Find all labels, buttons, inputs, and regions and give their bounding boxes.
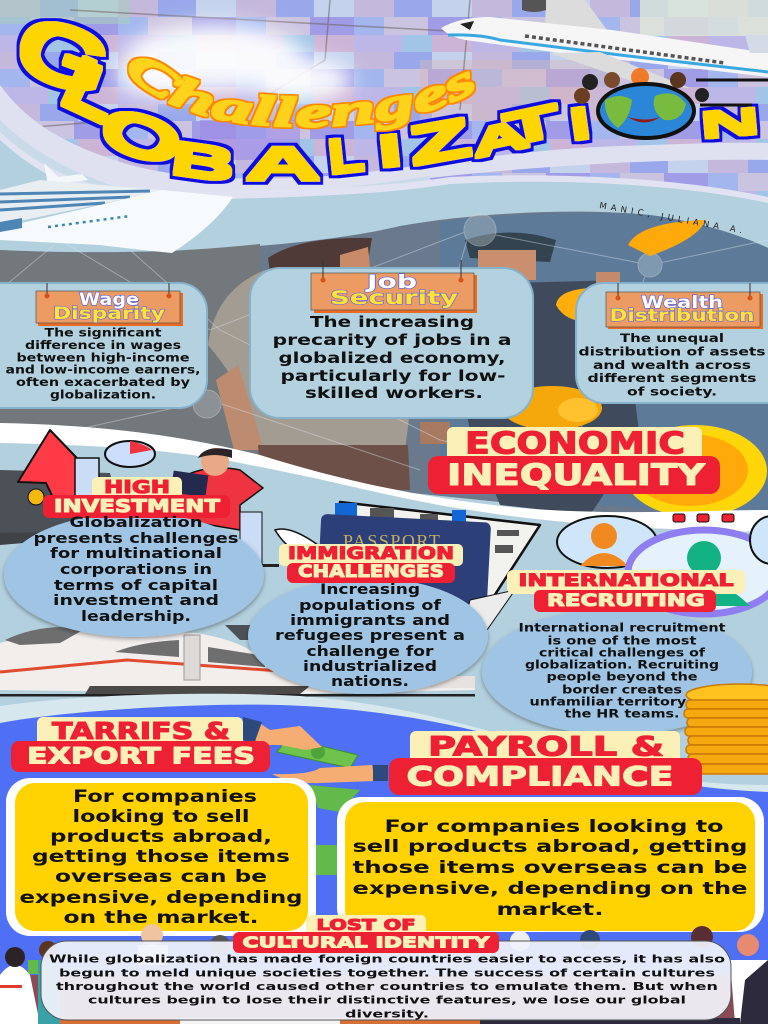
title: GLOBALIZATION	[2, 0, 762, 192]
panel: wage disparity	[0, 283, 207, 408]
text: wealth distribution: distribution of assets	[578, 344, 766, 358]
panel: lost of cultural identity	[41, 915, 731, 1020]
heading: economic inequality: INEQUALITY	[447, 458, 706, 492]
text: wealth distribution	[578, 331, 766, 398]
text: job security: globalized economy,	[278, 349, 506, 367]
heading: high investment: HIGH	[104, 477, 170, 498]
sign: job security heading: Job	[364, 271, 417, 293]
text: immigration challenges: industrialized	[303, 659, 437, 675]
text: tariffs and export fees: For companies	[73, 787, 257, 807]
illustration: person in beige shirt	[208, 238, 416, 490]
illustration: passport and tickets	[225, 502, 540, 653]
title: GLOBALIZATION: T	[499, 95, 565, 155]
heading: immigration challenges	[279, 544, 463, 583]
text: tariffs and export fees: getting those items	[32, 847, 290, 867]
sign: job security heading: Security	[330, 287, 459, 309]
background: flag mosaic sky	[0, 0, 768, 260]
text: high investment: corporations in	[60, 562, 212, 578]
wave bands	[0, 85, 768, 262]
cloud	[115, 24, 352, 102]
text: tariffs and export fees: expensive, depending	[20, 888, 302, 908]
text: payroll and compliance: market.	[496, 900, 604, 920]
illustration: person in dark suit	[420, 232, 640, 515]
text: wage disparity: difference in wages	[25, 339, 181, 352]
airplane	[441, 0, 768, 88]
illustration: passport and tickets: PASSPORT	[343, 531, 441, 551]
heading: immigration challenges: CHALLENGES	[298, 562, 444, 582]
text: payroll and compliance: expensive, depending on the	[352, 879, 748, 899]
text: high investment: Globalization	[70, 515, 202, 531]
text: wage disparity: The significant	[44, 326, 162, 340]
illustration: recruiting magnifier	[557, 516, 768, 614]
sign: wealth distribution heading: Distribution	[610, 306, 754, 326]
text: wealth distribution: of society.	[627, 384, 717, 398]
text: high investment: for multinational	[50, 546, 222, 562]
dots	[673, 514, 734, 522]
text: lost of cultural identity: cultures begin to lose their distinctive features, we lose our global	[88, 994, 686, 1006]
heading: economic inequality: ECONOMIC	[465, 426, 685, 462]
text: high investment: terms of capital	[54, 578, 218, 594]
text: immigration challenges: immigrants and	[290, 613, 450, 629]
heading: tariffs and export fees: TARRIFS &	[52, 719, 230, 745]
icon: smiling globe with children	[574, 68, 768, 138]
text: lost of cultural identity: diversity.	[345, 1008, 429, 1020]
text: wage disparity: globalization.	[50, 388, 156, 402]
text: wage disparity	[6, 326, 200, 402]
text: lost of cultural identity: While globalization has made foreign countries easier to access, it has also	[49, 952, 725, 966]
title: Challenges: Challenges	[127, 56, 476, 132]
title: GLOBALIZATION: A	[245, 138, 321, 190]
text: tariffs and export fees: on the market.	[64, 908, 258, 928]
text: high investment	[34, 515, 238, 625]
sign: wage disparity heading: Wage	[79, 290, 139, 310]
text: job security	[272, 313, 512, 402]
title: GLOBALIZATION: L	[326, 128, 366, 184]
panel: high investment	[4, 477, 264, 637]
text: high investment: presents challenges	[34, 531, 238, 547]
text: international recruiting: is one of the most	[548, 634, 697, 648]
text: wage disparity: often exacerbated by	[16, 376, 191, 389]
text: wage disparity: between high-income	[16, 352, 190, 364]
text: job security: The increasing	[310, 313, 474, 331]
text: international recruiting	[518, 622, 726, 720]
heading: economic inequality	[428, 426, 720, 494]
illustration: high speed train	[0, 627, 475, 696]
illustration: crowd of diverse people	[0, 924, 768, 1024]
text: immigration challenges	[275, 582, 465, 690]
heading: payroll and compliance	[389, 731, 702, 795]
text: immigration challenges: populations of	[299, 598, 442, 614]
text: lost of cultural identity	[49, 952, 725, 1020]
network lines	[0, 214, 768, 480]
text: tariffs and export fees: looking to sell	[72, 807, 250, 827]
author credit: MANIC, JULIANA A.	[598, 201, 743, 236]
text: international recruiting: International recruitment	[518, 622, 726, 634]
text: wealth distribution: The unequal	[620, 331, 724, 345]
lower section background with white wave	[0, 423, 768, 720]
heading: high investment	[43, 477, 230, 518]
coins	[502, 220, 767, 517]
text: payroll and compliance: those items overseas can be	[352, 858, 748, 878]
title: GLOBALIZATION: B	[167, 132, 239, 192]
panel: immigration challenges	[248, 544, 488, 694]
sign: job security heading	[311, 260, 477, 313]
text: immigration challenges: challenge for	[306, 644, 434, 660]
text: immigration challenges: nations.	[331, 674, 409, 690]
title: GLOBALIZATION: A	[467, 112, 533, 166]
text: tariffs and export fees: products abroad,	[50, 827, 272, 847]
background: dark network panel with people	[0, 212, 768, 530]
heading: international recruiting: INTERNATIONAL	[518, 571, 734, 591]
text: wage disparity: and low-income earners,	[6, 364, 200, 376]
text: wealth distribution: and wealth across	[593, 358, 751, 372]
text: payroll and compliance: For companies looking to	[384, 817, 724, 837]
panel: international recruiting	[482, 570, 752, 735]
text: international recruiting: critical challenges of	[539, 646, 705, 660]
sign: wage disparity heading	[36, 283, 183, 326]
text: lost of cultural identity: begun to meld unique societies together. The success of certain cultures	[59, 966, 715, 980]
heading: payroll and compliance: COMPLIANCE	[406, 762, 674, 792]
text: job security: particularly for low-	[280, 367, 506, 385]
illustration: hands exchanging money	[243, 717, 388, 875]
ship	[0, 163, 233, 253]
heading: lost of cultural identity: LOST OF	[316, 916, 416, 934]
illustration: arrow, chart and businessman	[18, 430, 279, 567]
text: tariffs and export fees	[20, 787, 302, 928]
text: lost of cultural identity: throughout the world caused other countries to emulate them. But when	[56, 980, 718, 993]
heading: lost of cultural identity: CULTURAL IDENTITY	[242, 934, 491, 952]
sign: wealth distribution heading	[606, 283, 763, 329]
text: international recruiting: border creates	[562, 684, 682, 696]
sign: wage disparity heading: Disparity	[53, 304, 165, 324]
text: high investment: leadership.	[81, 609, 191, 625]
text: immigration challenges: Increasing	[320, 582, 420, 598]
panel: payroll and compliance	[337, 731, 764, 932]
title: GLOBALIZATION: I	[375, 125, 405, 177]
text: wealth distribution: different segments	[588, 371, 757, 385]
text: international recruiting: globalization. Recruiting	[525, 658, 719, 672]
text: international recruiting: the HR teams.	[564, 708, 680, 720]
heading: tariffs and export fees	[11, 717, 270, 772]
text: international recruiting: people beyond the	[546, 670, 698, 684]
title: GLOBALIZATION: I	[566, 98, 594, 150]
text: job security: precarity of jobs in a	[272, 331, 512, 349]
panel: tariffs and export fees	[6, 717, 316, 936]
text: high investment: investment and	[53, 593, 219, 609]
heading: international recruiting	[507, 570, 745, 612]
heading: international recruiting: RECRUITING	[547, 591, 705, 611]
heading: lost of cultural identity	[233, 915, 499, 953]
text: payroll and compliance	[352, 817, 748, 920]
panel: wealth distribution	[576, 283, 768, 403]
text: payroll and compliance: sell products abroad, getting	[352, 837, 748, 857]
text: job security: skilled workers.	[305, 384, 483, 402]
title: GLOBALIZATION: L	[50, 40, 134, 140]
title: GLOBALIZATION: Z	[404, 107, 476, 177]
title: GLOBALIZATION: N	[698, 100, 762, 146]
heading: high investment: INVESTMENT	[54, 496, 221, 517]
sign: wealth distribution heading: Wealth	[641, 293, 723, 313]
heading: immigration challenges: IMMIGRATION	[288, 544, 454, 564]
bottom section: blue background	[0, 694, 768, 1024]
illustration: stack of coins	[684, 684, 768, 774]
heading: payroll and compliance: PAYROLL &	[428, 732, 664, 762]
text: immigration challenges: refugees present a	[275, 628, 465, 644]
heading: tariffs and export fees: EXPORT FEES	[27, 744, 255, 770]
title: GLOBALIZATION: O	[91, 93, 191, 181]
text: tariffs and export fees: overseas can be	[55, 867, 267, 887]
panel: job security	[250, 260, 533, 418]
text: international recruiting: unfamiliar territory for	[530, 696, 715, 708]
